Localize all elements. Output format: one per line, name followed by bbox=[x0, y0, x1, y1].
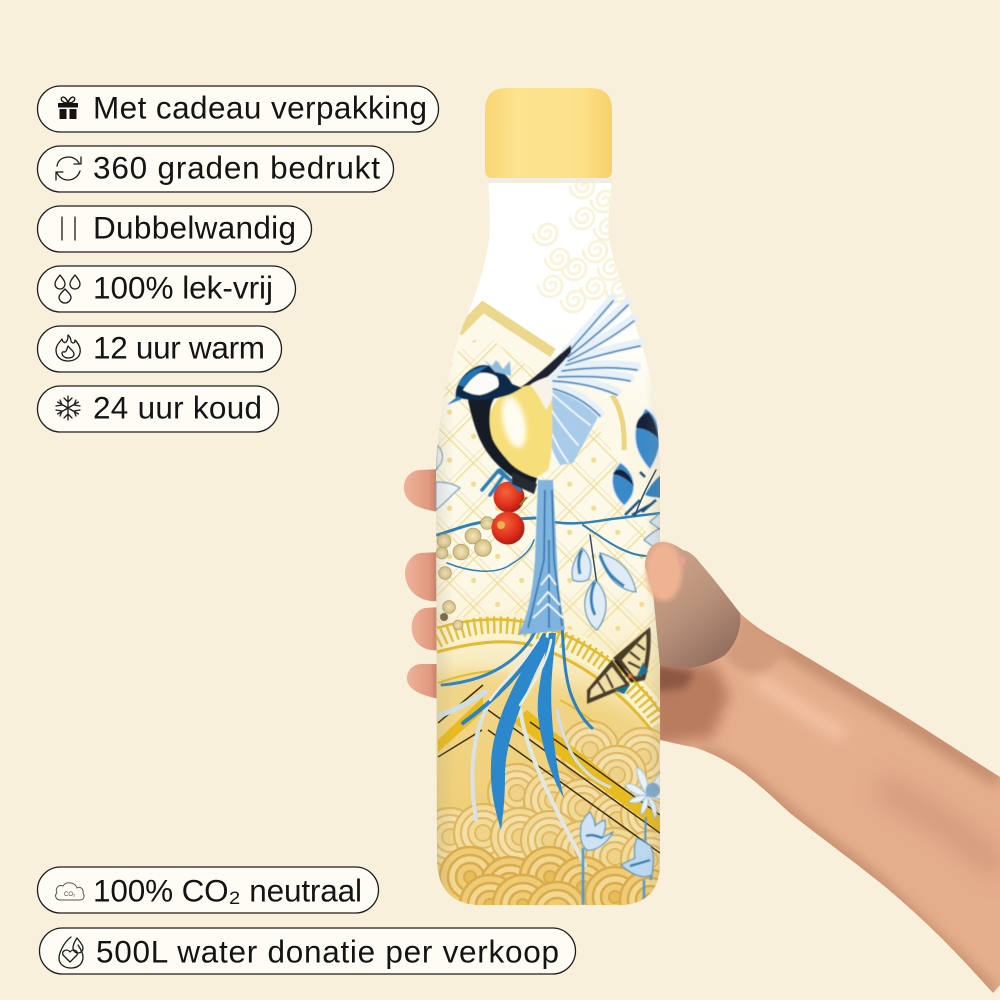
thumb body bbox=[645, 542, 740, 668]
icon: snowflake bbox=[56, 396, 80, 420]
icon: water drop with heart bbox=[59, 937, 83, 968]
crest feathers bbox=[483, 359, 511, 376]
blue flower bbox=[625, 767, 662, 850]
icon: flame bbox=[56, 335, 80, 361]
middle finger bbox=[405, 552, 440, 601]
icon: CO2 cloud bbox=[56, 883, 84, 900]
deep gold scallop pattern bbox=[438, 846, 660, 905]
feature pill: 360 degree print: 360 graden bedrukt bbox=[93, 150, 380, 186]
neck shading under cap bbox=[488, 178, 612, 183]
bottle body artwork bbox=[436, 178, 660, 905]
knuckle to wrist blend bbox=[724, 614, 782, 674]
tail texture bbox=[528, 490, 563, 628]
tendon highlight bbox=[757, 680, 845, 735]
feature pill: leak free: 100% lek-vrij bbox=[93, 270, 273, 306]
butterfly bbox=[587, 627, 651, 704]
feature pill: 360 degree print bbox=[38, 146, 394, 192]
ring finger bbox=[412, 607, 440, 650]
foot bbox=[482, 470, 530, 495]
upper wing feathers bbox=[550, 298, 640, 413]
arm lower edge shadow bbox=[700, 752, 993, 995]
shoulder feathers bbox=[530, 376, 553, 410]
feature pill: leak free bbox=[38, 266, 296, 312]
feature pill: double walled bbox=[38, 206, 312, 252]
lower wing feathers bbox=[543, 390, 590, 465]
feature pill: 12 hours warm: 12 uur warm bbox=[93, 330, 265, 366]
arm top edge shadow bbox=[745, 625, 1000, 780]
feature pill: gift wrapping bbox=[38, 86, 438, 132]
icon: water drops bbox=[55, 275, 80, 303]
bottle side shading bbox=[436, 382, 660, 888]
feature pill: CO2 neutral: 100% CO₂ neutraal bbox=[93, 872, 362, 908]
diagonal gold bands with dark lines bbox=[438, 685, 660, 853]
head blue cap bbox=[458, 366, 488, 387]
icon: refresh arrows bbox=[56, 157, 81, 180]
thumb tip bbox=[646, 543, 682, 601]
palm shading bbox=[650, 660, 730, 745]
icon: CO2 cloud: CO₂ bbox=[64, 892, 76, 898]
currants bbox=[436, 516, 494, 630]
pale scallop pattern bbox=[436, 720, 660, 873]
white cheek bbox=[463, 373, 499, 395]
upper tail bbox=[518, 480, 565, 635]
lattice arch panel bbox=[437, 314, 658, 660]
thumb in front of bottle bbox=[645, 542, 740, 668]
feature pill: 24 hours cold bbox=[38, 386, 278, 432]
belly white centre bbox=[498, 394, 530, 450]
index finger bbox=[404, 469, 440, 512]
little finger bbox=[407, 664, 440, 699]
watercolor wash bbox=[437, 672, 660, 905]
thumb nail edge bbox=[678, 556, 686, 566]
feature pill: CO2 neutral bbox=[38, 867, 378, 913]
gold railing arch bbox=[437, 619, 660, 790]
blue leaves bbox=[436, 408, 661, 630]
icon: double wall lines bbox=[62, 217, 75, 240]
feature pill: water donation bbox=[40, 928, 576, 974]
feature pill: 24 hours cold: 24 uur koud bbox=[93, 390, 262, 426]
blue tulip buds bbox=[581, 812, 653, 905]
upper wing feather lines bbox=[550, 301, 640, 416]
branches bbox=[437, 470, 661, 585]
feature pill: 12 hours warm bbox=[38, 326, 282, 372]
lace swirl ornament on shoulder bbox=[533, 177, 630, 312]
feature pill: water donation: 500L water donatie per verkoop bbox=[96, 934, 559, 970]
bottle cap bbox=[485, 88, 612, 178]
wing shoulder stripe bbox=[523, 347, 570, 388]
dark chest stripe bbox=[467, 392, 537, 490]
head bbox=[447, 365, 522, 405]
beak bbox=[447, 396, 462, 405]
bottle bbox=[436, 178, 660, 905]
long tail streamers bbox=[438, 620, 610, 865]
belly bbox=[490, 383, 552, 477]
gold chevron arch bbox=[458, 307, 553, 353]
feature pill: double walled: Dubbelwandig bbox=[93, 210, 296, 246]
icon: gift bbox=[58, 97, 78, 119]
bird bbox=[447, 298, 640, 635]
forearm crease bbox=[880, 785, 1000, 870]
lower wing bbox=[542, 385, 600, 465]
hand and arm behind the bottle bbox=[404, 469, 1000, 1000]
feature pill: gift wrapping: Met cadeau verpakking bbox=[93, 90, 427, 126]
red berries bbox=[492, 482, 527, 544]
arm and palm bbox=[650, 590, 1000, 1000]
